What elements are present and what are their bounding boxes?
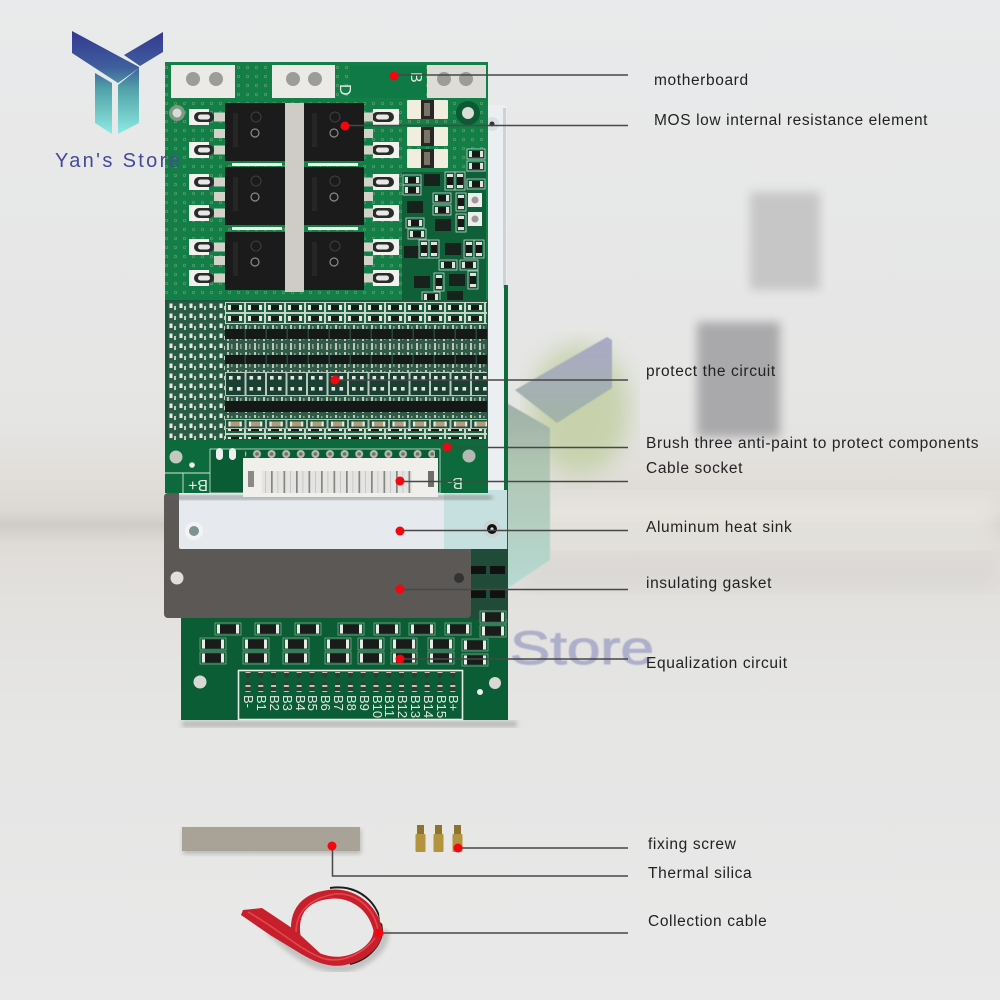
bottom connector with pin labels: B2 bbox=[267, 695, 282, 711]
bottom connector with pin labels: B11 bbox=[382, 695, 397, 717]
label: MOS element: MOS low internal resistance element bbox=[654, 112, 928, 129]
label: motherboard: motherboard bbox=[654, 72, 749, 89]
MOSFET pads bbox=[189, 109, 399, 286]
label: cable socket: Cable socket bbox=[646, 460, 743, 477]
logo mark bbox=[72, 31, 163, 134]
collection cable bbox=[241, 887, 397, 968]
bottom connector with pin labels: B+ bbox=[446, 695, 461, 711]
bottom connector with pin labels: B8 bbox=[344, 695, 359, 711]
silk labels on board: B bbox=[407, 72, 424, 83]
cable socket area bbox=[165, 440, 488, 497]
thermal silica strip bbox=[182, 827, 361, 854]
bottom connector with pin labels: B- bbox=[241, 695, 256, 708]
watermark: blurred store logo: Store bbox=[510, 621, 654, 674]
watermark: blurred store logo bbox=[505, 337, 654, 674]
leader lines bbox=[332, 75, 628, 933]
bottom connector with pin labels: B13 bbox=[408, 695, 423, 718]
label: thermal silica: Thermal silica bbox=[648, 865, 752, 882]
control circuit components bbox=[402, 149, 486, 303]
bottom connector with pin labels: B7 bbox=[331, 695, 346, 711]
label: equalization circuit: Equalization circuit bbox=[646, 655, 788, 672]
label: aluminum heat sink: Aluminum heat sink bbox=[646, 519, 792, 536]
silk labels on board bbox=[336, 72, 424, 96]
mounting holes bbox=[194, 676, 501, 695]
bottom connector with pin labels: B4 bbox=[293, 695, 308, 711]
bottom connector with pin labels: B6 bbox=[318, 695, 333, 711]
solder strip bbox=[285, 103, 304, 292]
bottom connector with pin labels: B9 bbox=[357, 695, 372, 711]
power resistors and mounting hole bbox=[407, 100, 480, 168]
protection circuit dense rows bbox=[165, 300, 488, 442]
fixing screws bbox=[416, 825, 462, 852]
aluminium backing plate edge bbox=[485, 105, 507, 505]
label: anti-paint: Brush three anti-paint to protect components bbox=[646, 435, 979, 452]
bottom connector with pin labels: B15 bbox=[434, 695, 449, 718]
label: collection cable: Collection cable bbox=[648, 913, 767, 930]
bottom connector with pin labels: B10 bbox=[370, 695, 385, 718]
bottom connector with pin labels: B1 bbox=[254, 695, 269, 711]
bottom connector with pin labels: B5 bbox=[305, 695, 320, 711]
bottom connector with pin labels bbox=[238, 670, 462, 720]
label: insulating gasket: insulating gasket bbox=[646, 575, 772, 592]
bottom connector with pin labels: B14 bbox=[421, 695, 436, 718]
bottom connector with pin labels: B3 bbox=[280, 695, 295, 711]
lower PCB: equalization board bbox=[181, 285, 517, 727]
MOS transistors bbox=[225, 103, 364, 290]
silver terminal tabs bbox=[171, 65, 486, 98]
resistor rows bbox=[200, 611, 506, 666]
silk labels on board: D bbox=[336, 84, 353, 96]
logo bbox=[55, 31, 182, 172]
aluminum heat sink bbox=[179, 490, 507, 549]
cable socket area: B- bbox=[447, 474, 463, 491]
bottom connector with pin labels: B12 bbox=[395, 695, 410, 718]
callout dots bbox=[328, 72, 462, 938]
logo text: Yan's Store bbox=[55, 150, 182, 172]
cable socket area: B+ bbox=[188, 476, 208, 493]
insulating gasket bbox=[164, 493, 471, 618]
label: protect the circuit: protect the circuit bbox=[646, 363, 776, 380]
label: fixing screw: fixing screw bbox=[648, 836, 737, 853]
upper PCB: motherboard bbox=[165, 62, 492, 500]
